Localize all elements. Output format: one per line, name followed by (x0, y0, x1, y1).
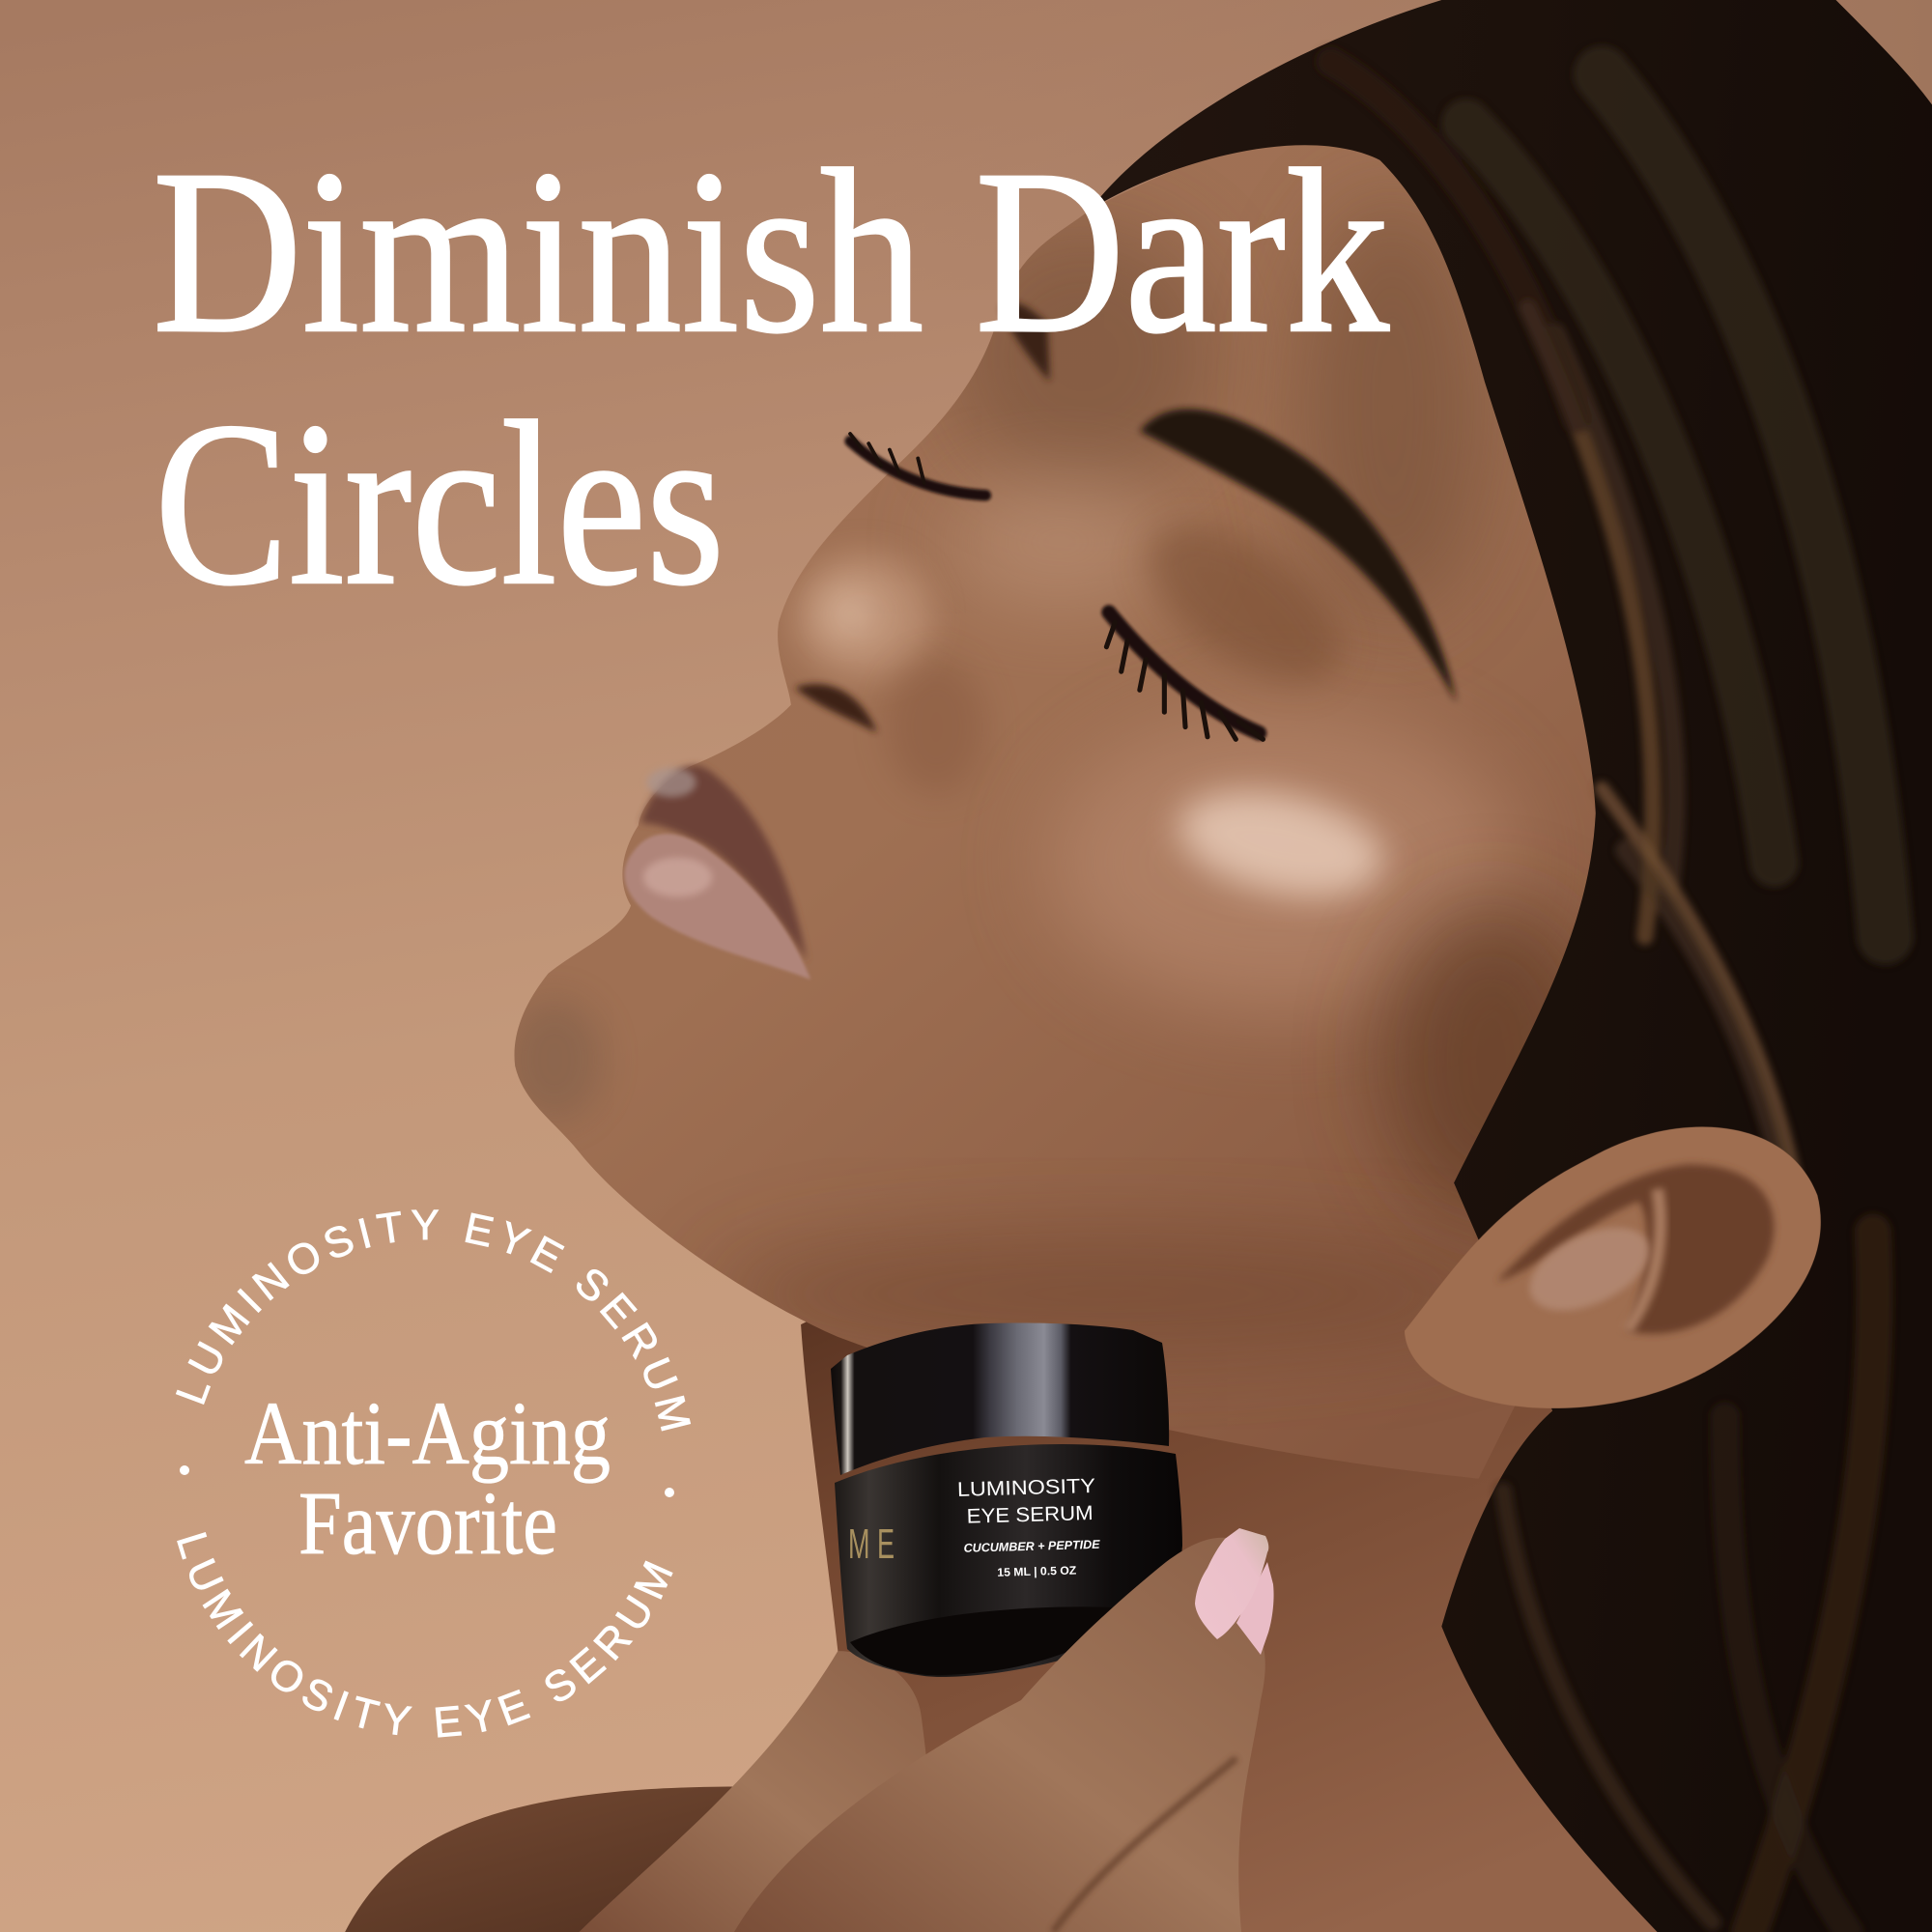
jar label text: LUMINOSITY (957, 1475, 1095, 1501)
badge center text: Favorite (298, 1474, 557, 1574)
nostril (795, 684, 877, 733)
jar label text: EYE SERUM (966, 1502, 1094, 1528)
far eyebrow (1001, 303, 1050, 382)
hair (1091, 0, 1932, 1932)
face (514, 145, 1596, 1478)
title: Diminish Dark (153, 121, 1389, 382)
jar label text (957, 1475, 1101, 1580)
jar body (835, 1444, 1182, 1677)
badge center text: Anti-Aging (244, 1384, 611, 1484)
jar base shadow (850, 1606, 1130, 1675)
title: Circles (155, 373, 724, 634)
title (153, 121, 1389, 634)
lips (625, 766, 810, 980)
badge center text (244, 1384, 611, 1574)
badge right dot (665, 1488, 674, 1497)
badge left dot (180, 1465, 189, 1475)
far eye lashes (850, 434, 985, 496)
circular badge (176, 1209, 692, 1738)
ear (1405, 1126, 1821, 1408)
finger crease (1053, 1758, 1236, 1932)
closed eye lashes (1106, 612, 1263, 739)
neck (801, 1306, 1725, 1932)
nails (1195, 1528, 1274, 1655)
hair strands and highlights (1331, 62, 1886, 1932)
badge top arc text: LUMINOSITY EYE SERUM (176, 1209, 692, 1432)
badge bottom arc text: LUMINOSITY EYE SERUM (177, 1532, 673, 1738)
jar brand letters: M E (848, 1520, 895, 1568)
back finger (579, 1651, 936, 1932)
jar label text: CUCUMBER + PEPTIDE (963, 1538, 1100, 1555)
shoulder (345, 1786, 887, 1932)
jar lid (831, 1322, 1169, 1475)
eyebrow (1140, 409, 1457, 702)
product jar (831, 1322, 1182, 1677)
front finger (734, 1538, 1265, 1932)
jar label text: 15 ML | 0.5 OZ (997, 1564, 1076, 1579)
